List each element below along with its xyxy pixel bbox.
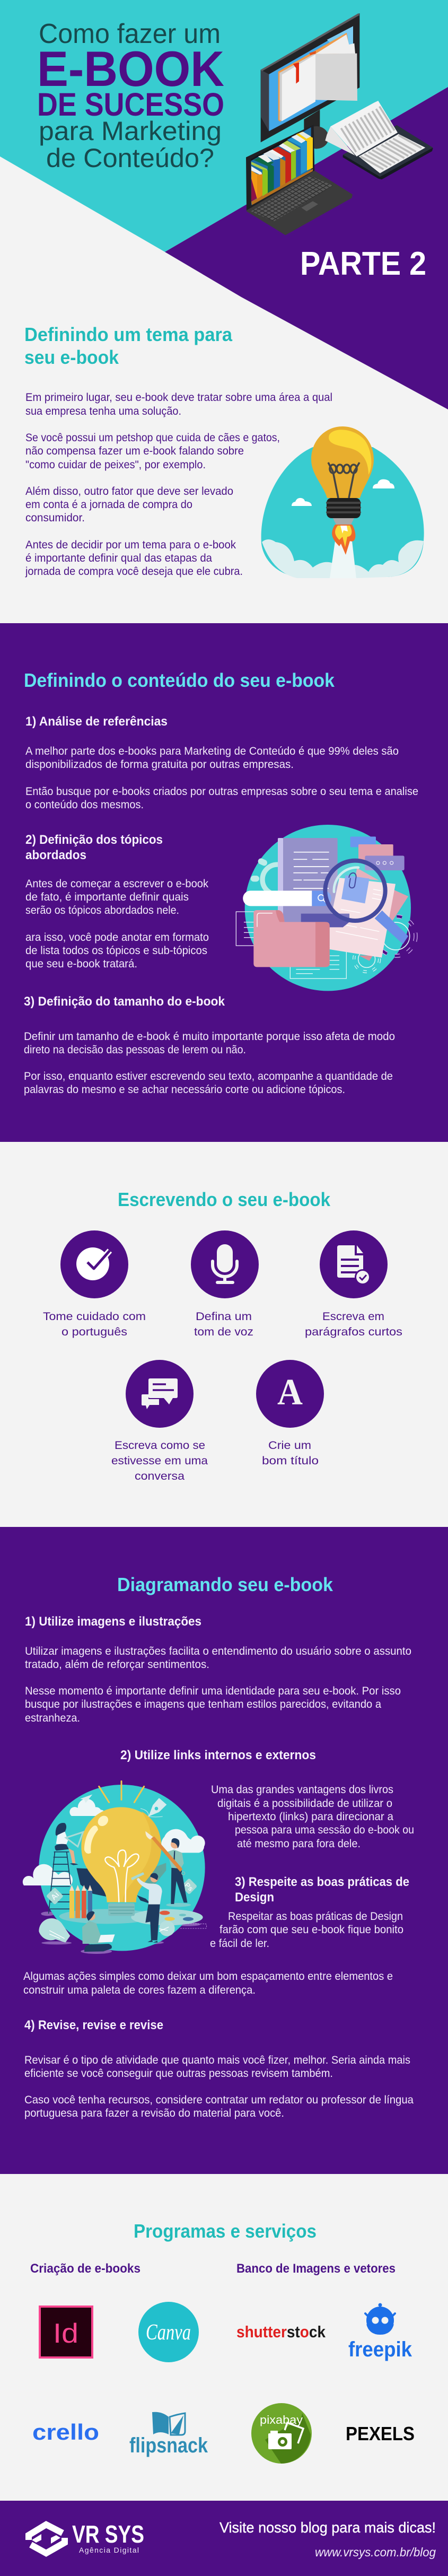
icon: tablet with open book bbox=[325, 101, 433, 179]
subsection: utilize imagens: estranheza. bbox=[25, 1712, 80, 1724]
heading: escrevendo: Escrevendo o seu e-book bbox=[118, 1189, 331, 1210]
logo: vr sys: Agência Digital bbox=[79, 2546, 139, 2554]
paint palette bbox=[59, 1909, 207, 1928]
subsection: utilize links: 2) Utilize links internos e externos bbox=[120, 1748, 316, 1762]
subsection: utilize imagens: busque por ilustrações e imagens que tenham estilos parecidos, evitando a bbox=[25, 1698, 381, 1710]
clouds bbox=[23, 1798, 205, 1885]
subsection: boas práticas de design: e fácil de ler. bbox=[210, 1937, 269, 1950]
text block: tema: Antes de decidir por um tema para o e-book bbox=[25, 539, 236, 551]
subsection: utilize links: pessoa para uma sessão do e-book ou bbox=[235, 1824, 414, 1836]
subsection: análise de referências: 1) Análise de referências bbox=[25, 714, 168, 729]
subsection: utilize imagens: tratado, além de reforçar sentimentos. bbox=[25, 1658, 209, 1671]
icon: laptop with bookshelf screen bbox=[246, 125, 353, 235]
icon: Ai badge bbox=[46, 1887, 64, 1905]
title: para Marketing bbox=[39, 116, 222, 146]
subsection: definição dos tópicos: Antes de começar a escrever o e-book bbox=[25, 878, 208, 890]
subheading: banco de imagens: Banco de Imagens e vetores bbox=[236, 2261, 396, 2276]
icon: Ps badge bbox=[181, 1878, 197, 1894]
subsection: utilize links: até mesmo para fora dele. bbox=[237, 1838, 361, 1850]
text block: tema: é importante definir qual das etapas da bbox=[25, 552, 212, 564]
panel: diagramando seu e-book bbox=[0, 1527, 448, 2174]
subsection: utilize links: hipertexto (links) para direcionar a bbox=[228, 1811, 393, 1823]
item: escreva como se estivesse em uma conversa: Escreva como se bbox=[115, 1439, 205, 1452]
text block: tema: Além disso, outro fator que deve ser levado bbox=[25, 485, 233, 497]
subsection: definição do tamanho: 3) Definição do tamanho do e-book bbox=[24, 994, 225, 1009]
subsection: revise bbox=[24, 2018, 414, 2119]
item: escreva como se estivesse em uma conversa: conversa bbox=[135, 1470, 185, 1482]
subsection: utilize imagens bbox=[25, 1614, 411, 1724]
item: escreva em parágrafos curtos bbox=[305, 1230, 402, 1338]
title: E-BOOK bbox=[37, 41, 224, 97]
illustration: documents and magnifier bbox=[236, 825, 416, 991]
subsection: boas práticas de design: farão com que seu e-book fique bonito bbox=[219, 1924, 403, 1936]
icon: monitor bbox=[261, 13, 359, 149]
illustration: light bulb rocket bbox=[261, 426, 424, 578]
subsection: utilize links: Uma das grandes vantagens dos livros bbox=[211, 1784, 393, 1796]
icon: pencils bbox=[69, 1885, 92, 1918]
item: tome cuidado com o português: Tome cuidado com bbox=[43, 1311, 146, 1323]
logo: flipsnack bbox=[129, 2412, 208, 2457]
item: escreva como se estivesse em uma conversa bbox=[111, 1360, 208, 1482]
icon: papers bbox=[301, 868, 408, 961]
item: crie um bom título: A bbox=[277, 1372, 303, 1413]
subsection: utilize imagens: 1) Utilize imagens e ilustrações bbox=[25, 1614, 201, 1629]
logo: pixabay bbox=[251, 2403, 312, 2464]
subsection: definição do tamanho bbox=[24, 994, 395, 1096]
label: parte 2: PARTE 2 bbox=[300, 246, 426, 282]
subsection: utilize imagens: Utilizar imagens e ilustrações facilita o entendimento do usuário sobre o assunto bbox=[25, 1645, 411, 1657]
subsection: definição dos tópicos: de fato, é importante definir quais bbox=[25, 891, 189, 903]
subsection: definição dos tópicos bbox=[25, 833, 209, 970]
panel: escrevendo o seu e-book bbox=[0, 1142, 448, 1527]
subsection: utilize links bbox=[120, 1748, 414, 1850]
heading: definindo um tema: seu e-book bbox=[24, 346, 119, 368]
subsection: utilize imagens: Nesse momento é importante definir uma identidade para seu e-book. Por isso bbox=[25, 1685, 401, 1697]
icon: sticky tags bbox=[350, 836, 405, 870]
subheading: criação de e-books: Criação de e-books bbox=[30, 2261, 140, 2276]
item: crie um bom título: Crie um bbox=[268, 1439, 311, 1452]
title: de Conteúdo? bbox=[46, 143, 214, 173]
title bbox=[37, 19, 224, 173]
heading: diagramando: Diagramando seu e-book bbox=[117, 1574, 333, 1595]
subsection: análise de referências bbox=[25, 714, 418, 811]
panel: hero header bbox=[0, 0, 448, 623]
item: tome cuidado com o português bbox=[43, 1230, 146, 1338]
footer bbox=[0, 2501, 448, 2576]
title: DE SUCESSO bbox=[37, 86, 224, 123]
text block: tema: em conta é a jornada de compra do bbox=[25, 499, 192, 511]
subsection: definição do tamanho: palavras do mesmo e se achar necessário corte ou adicione tópicos. bbox=[24, 1084, 345, 1096]
text: blog url: www.vrsys.com.br/blog bbox=[315, 2545, 436, 2559]
item: defina um tom de voz: tom de voz bbox=[194, 1326, 253, 1338]
logo: pexels: PEXELS bbox=[346, 2423, 415, 2444]
subsection: análise de referências: A melhor parte dos e-books para Marketing de Conteúdo é que 99% deles são bbox=[25, 745, 399, 757]
panel: definindo o conteúdo bbox=[0, 623, 448, 1142]
item: escreva em parágrafos curtos: Escreva em bbox=[322, 1311, 384, 1323]
icon: Ps badge: Ps bbox=[183, 1881, 195, 1893]
logo: canva bbox=[138, 2302, 199, 2362]
illustration: creative team around light bulb bbox=[23, 1781, 207, 1954]
icon: pen nib bbox=[140, 1798, 166, 1817]
icon: man with brush bbox=[145, 1831, 191, 1907]
icon: magnifier bbox=[325, 861, 408, 944]
logo: freepik bbox=[348, 2303, 412, 2361]
icon: bulb bbox=[311, 426, 374, 555]
icon: main document bbox=[278, 838, 338, 923]
leaves bbox=[76, 1863, 166, 1904]
text block: tema: Se você possui um petshop que cuida de cães e gatos, bbox=[25, 432, 280, 444]
title: Como fazer um bbox=[39, 19, 221, 49]
subsection: definição dos tópicos: que seu e-book tratará. bbox=[25, 958, 137, 970]
subsection: revise: Revisar é o tipo de atividade que quanto mais você fizer, melhor. Seria ainda mais bbox=[24, 2054, 410, 2066]
subsection: análise de referências: disponibilizados de forma gratuita por outras empresas. bbox=[25, 758, 294, 771]
item: crie um bom título bbox=[256, 1360, 324, 1467]
subsection: boas práticas de design: Respeitar as boas práticas de Design bbox=[228, 1910, 403, 1923]
icon: gears outline bbox=[354, 916, 416, 972]
panel: programas e serviços bbox=[0, 2174, 448, 2501]
icon: ladder with woman bbox=[49, 1823, 83, 1914]
logo: flipsnack: flipsnack bbox=[129, 2434, 208, 2457]
subsection: definição do tamanho: direto na decisão das pessoas de lerem ou não. bbox=[24, 1044, 246, 1056]
subsection: análise de referências: Então busque por e-books criados por outras empresas sobre o seu tema e analise bbox=[25, 785, 418, 798]
item: tome cuidado com o português: o português bbox=[62, 1326, 127, 1338]
logo: freepik: freepik bbox=[348, 2338, 412, 2361]
logo: indesign bbox=[39, 2306, 93, 2359]
subsection: boas práticas de design bbox=[23, 1875, 409, 1996]
logo: vr sys: VR SYS bbox=[72, 2520, 144, 2548]
subsection: definição dos tópicos: ara isso, você pode anotar em formato bbox=[25, 931, 209, 944]
subsection: definição dos tópicos: de lista todos os tópicos e sub-tópicos bbox=[25, 945, 207, 957]
text block: tema bbox=[25, 391, 332, 578]
item: escreva em parágrafos curtos: parágrafos curtos bbox=[305, 1326, 402, 1338]
subsection: boas práticas de design: 3) Respeite as boas práticas de bbox=[235, 1875, 409, 1889]
icon: big bulb bbox=[81, 1807, 161, 1916]
subsection: revise: Caso você tenha recursos, considere contratar um redator ou professor de língua bbox=[24, 2094, 414, 2106]
subsection: definição dos tópicos: abordados bbox=[25, 848, 86, 862]
subsection: definição dos tópicos: serão os tópicos abordados nele. bbox=[25, 904, 179, 916]
icon: Ai badge: Ai bbox=[49, 1891, 61, 1902]
logo: indesign: Id bbox=[53, 2318, 78, 2349]
rays bbox=[99, 1781, 144, 1802]
logo: canva: Canva bbox=[146, 2320, 191, 2345]
logo: vr sys bbox=[29, 2520, 144, 2554]
item: defina um tom de voz: Defina um bbox=[196, 1311, 252, 1323]
icon: folder bbox=[253, 910, 330, 967]
logo: shutterstock: shutterstock bbox=[236, 2322, 326, 2341]
icon: small bulbs bbox=[39, 1918, 175, 1943]
icon: search bar bbox=[243, 890, 331, 906]
subsection: boas práticas de design: construir uma paleta de cores fazem a diferença. bbox=[23, 1984, 256, 1996]
heading: programas e serviços: Programas e serviços bbox=[134, 2220, 317, 2242]
text block: tema: Em primeiro lugar, seu e-book deve tratar sobre uma área a qual bbox=[25, 391, 332, 404]
icon: left gear bbox=[253, 861, 293, 898]
subsection: definição do tamanho: Por isso, enquanto estiver escrevendo seu texto, acompanhe a quantidade de bbox=[24, 1070, 393, 1082]
subsection: boas práticas de design: Design bbox=[235, 1890, 274, 1905]
text block: tema: "como cuidar de peixes", por exemplo. bbox=[25, 459, 206, 471]
subsection: boas práticas de design: Algumas ações simples como deixar um bom espaçamento entre elementos e bbox=[23, 1970, 393, 1983]
item: crie um bom título: bom título bbox=[262, 1455, 319, 1467]
subsection: utilize links: digitais é a possibilidade de utilizar o bbox=[217, 1797, 392, 1810]
text block: tema: não compensa fazer um e-book falando sobre bbox=[25, 445, 244, 457]
icon: seated man with laptop bbox=[82, 1911, 115, 1952]
text block: tema: jornada de compra você deseja que ele cubra. bbox=[25, 565, 243, 578]
logo: crello: crello bbox=[32, 2420, 99, 2444]
illustration: monitor, laptop and tablet with books bbox=[246, 13, 433, 235]
subsection: definição dos tópicos: 2) Definição dos tópicos bbox=[25, 833, 163, 847]
text: visite nosso blog: Visite nosso blog para mais dicas! bbox=[219, 2519, 436, 2536]
heading: definindo um tema bbox=[24, 324, 233, 368]
icon: outlined documents bbox=[236, 912, 346, 979]
icon: man with ruler bbox=[131, 1872, 162, 1943]
subsection: definição do tamanho: Definir um tamanho de e-book é muito importante porque isso afeta de modo bbox=[24, 1031, 395, 1043]
logo: pixabay: pixabay bbox=[260, 2413, 303, 2426]
text block: tema: consumidor. bbox=[25, 512, 85, 524]
subsection: revise: portuguesa para fazer a revisão do material para você. bbox=[24, 2107, 284, 2119]
item: escreva como se estivesse em uma conversa: estivesse em uma bbox=[111, 1455, 208, 1467]
subsection: análise de referências: o conteúdo dos mesmos. bbox=[25, 799, 144, 811]
subsection: revise: eficiente se você conseguir que outras pessoas revisem também. bbox=[24, 2067, 333, 2080]
subsection: revise: 4) Revise, revise e revise bbox=[24, 2018, 163, 2032]
heading: definindo o conteúdo: Definindo o conteúdo do seu e-book bbox=[24, 669, 335, 691]
heading: definindo um tema: Definindo um tema para bbox=[24, 324, 233, 345]
item: defina um tom de voz bbox=[191, 1230, 259, 1338]
text block: tema: sua empresa tenha uma solução. bbox=[25, 405, 181, 417]
